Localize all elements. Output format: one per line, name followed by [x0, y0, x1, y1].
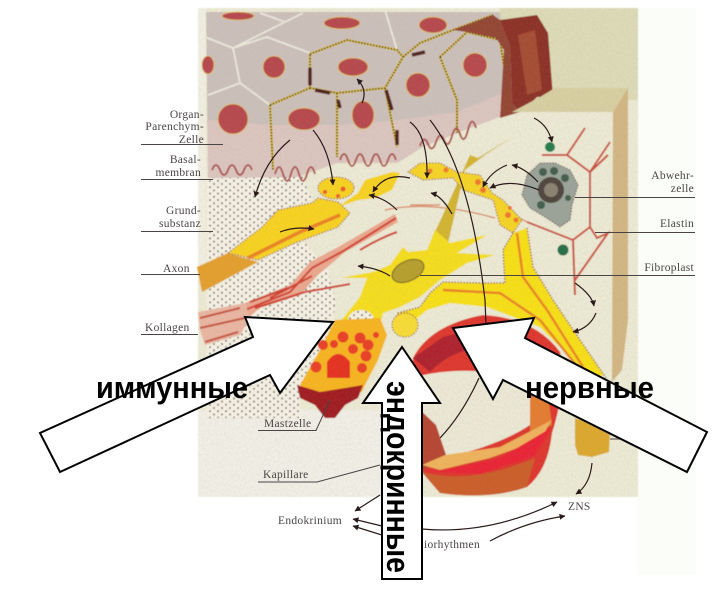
- cell borders light: [205, 10, 397, 105]
- nerve stub: [575, 418, 610, 457]
- panel background: [198, 8, 638, 497]
- axon inner strands: [248, 215, 340, 258]
- label: Biorhythmen: Biorhythmen: [416, 539, 480, 551]
- label: Basalmembran: membran: [155, 167, 201, 179]
- dark junctions: [310, 52, 425, 145]
- label: Endokrinium: Endokrinium: [278, 515, 342, 527]
- grain overlay: [198, 8, 638, 497]
- defence cell body: [522, 163, 578, 227]
- arrow: endocrine: [363, 347, 440, 579]
- vessel dark inner: [413, 325, 490, 372]
- top bouton: [318, 177, 354, 199]
- nuclei: [202, 12, 487, 134]
- vessel outer wall: [410, 315, 562, 495]
- yellow beaded fibre: [408, 163, 522, 233]
- golden branch: [435, 137, 512, 243]
- axon bulb: [228, 198, 350, 260]
- small yellow bouton: [392, 313, 418, 337]
- lower external arrows: [353, 495, 565, 541]
- cell sheet: [206, 12, 510, 178]
- label: Abwehrzelle: Abwehr-: [651, 170, 694, 182]
- axon and bulb: [197, 172, 400, 292]
- label: Grundsubstanz: Grund-: [166, 205, 201, 217]
- brown fold: [500, 15, 553, 112]
- nerve dotted edge: [393, 228, 606, 378]
- arrow: nervous: [453, 318, 707, 472]
- arrow: immune: [40, 317, 333, 472]
- vessel wall right: [530, 385, 552, 435]
- label: Mastzelle: Mastzelle: [264, 418, 311, 430]
- fibroblast hole: [348, 310, 374, 330]
- heading: immune: иммунные: [96, 370, 248, 405]
- mast cell: [297, 318, 387, 418]
- collagen bundle: [245, 214, 398, 318]
- label: Kapillare: Kapillare: [263, 469, 308, 481]
- label: Kollagen: Kollagen: [145, 322, 190, 334]
- vessel left chunk: [420, 410, 447, 470]
- label: ZNS: ZNS: [568, 501, 591, 513]
- label: Fibroplast: Fibroplast: [644, 262, 695, 274]
- vessel red band: [422, 428, 551, 474]
- vessel lumen: [418, 371, 530, 458]
- organ parenchyma cells: [202, 10, 553, 181]
- collagen stump: [198, 303, 250, 345]
- collagen strands: [245, 218, 397, 310]
- green cells: [545, 142, 555, 152]
- right edge strip: [612, 88, 628, 382]
- dotted cell borders: [270, 15, 510, 170]
- big yellow nerve: [393, 228, 604, 378]
- elastin fibres: [527, 128, 610, 295]
- basal membrane band: [512, 88, 628, 112]
- leader lines: [141, 144, 695, 482]
- upper beige area: [500, 8, 638, 100]
- axon extension: [338, 172, 400, 207]
- axon trunk: [197, 253, 258, 292]
- label: Grundsubstanz: substanz: [159, 218, 201, 230]
- fibroblast nucleus: [388, 255, 428, 287]
- label: Organ-Parenchym-Zelle: Parenchym-: [145, 121, 204, 133]
- mast cell nucleus: [327, 354, 350, 378]
- stipple: ground substance: [207, 176, 336, 418]
- lower left pale area: [198, 410, 388, 497]
- page background tint: [638, 8, 696, 575]
- fine red strands: [385, 205, 527, 222]
- panel: histology illustration: [197, 8, 638, 497]
- blood vessel: [410, 315, 562, 495]
- vessel base texture: [422, 458, 535, 495]
- mast cell granules: [310, 332, 379, 373]
- label: Abwehrzelle: zelle: [671, 183, 694, 195]
- label: Organ-Parenchym-Zelle: Zelle: [179, 134, 204, 146]
- defence cell nucleus: [538, 177, 564, 203]
- brown cell band: [453, 15, 520, 118]
- mast cell dark base: [297, 385, 363, 418]
- nerve orange strands: [443, 233, 583, 370]
- internal curved arrows: [255, 79, 596, 494]
- mast cell body: [300, 318, 387, 392]
- heading: nervous: нервные: [525, 370, 654, 405]
- defence cell: [522, 163, 578, 227]
- central fibroblast: [340, 230, 495, 325]
- lower cell shading: [208, 90, 510, 178]
- basal wave: [212, 121, 476, 181]
- label: Elastin: Elastin: [660, 218, 694, 230]
- label: Basalmembran: Basal-: [170, 154, 201, 166]
- label: Axon: Axon: [163, 263, 190, 275]
- vessel yellow band: [422, 420, 552, 470]
- label: Organ-Parenchym-Zelle: Organ-: [170, 109, 204, 121]
- left pale margin: [198, 8, 206, 268]
- collagen fibres: [198, 214, 398, 345]
